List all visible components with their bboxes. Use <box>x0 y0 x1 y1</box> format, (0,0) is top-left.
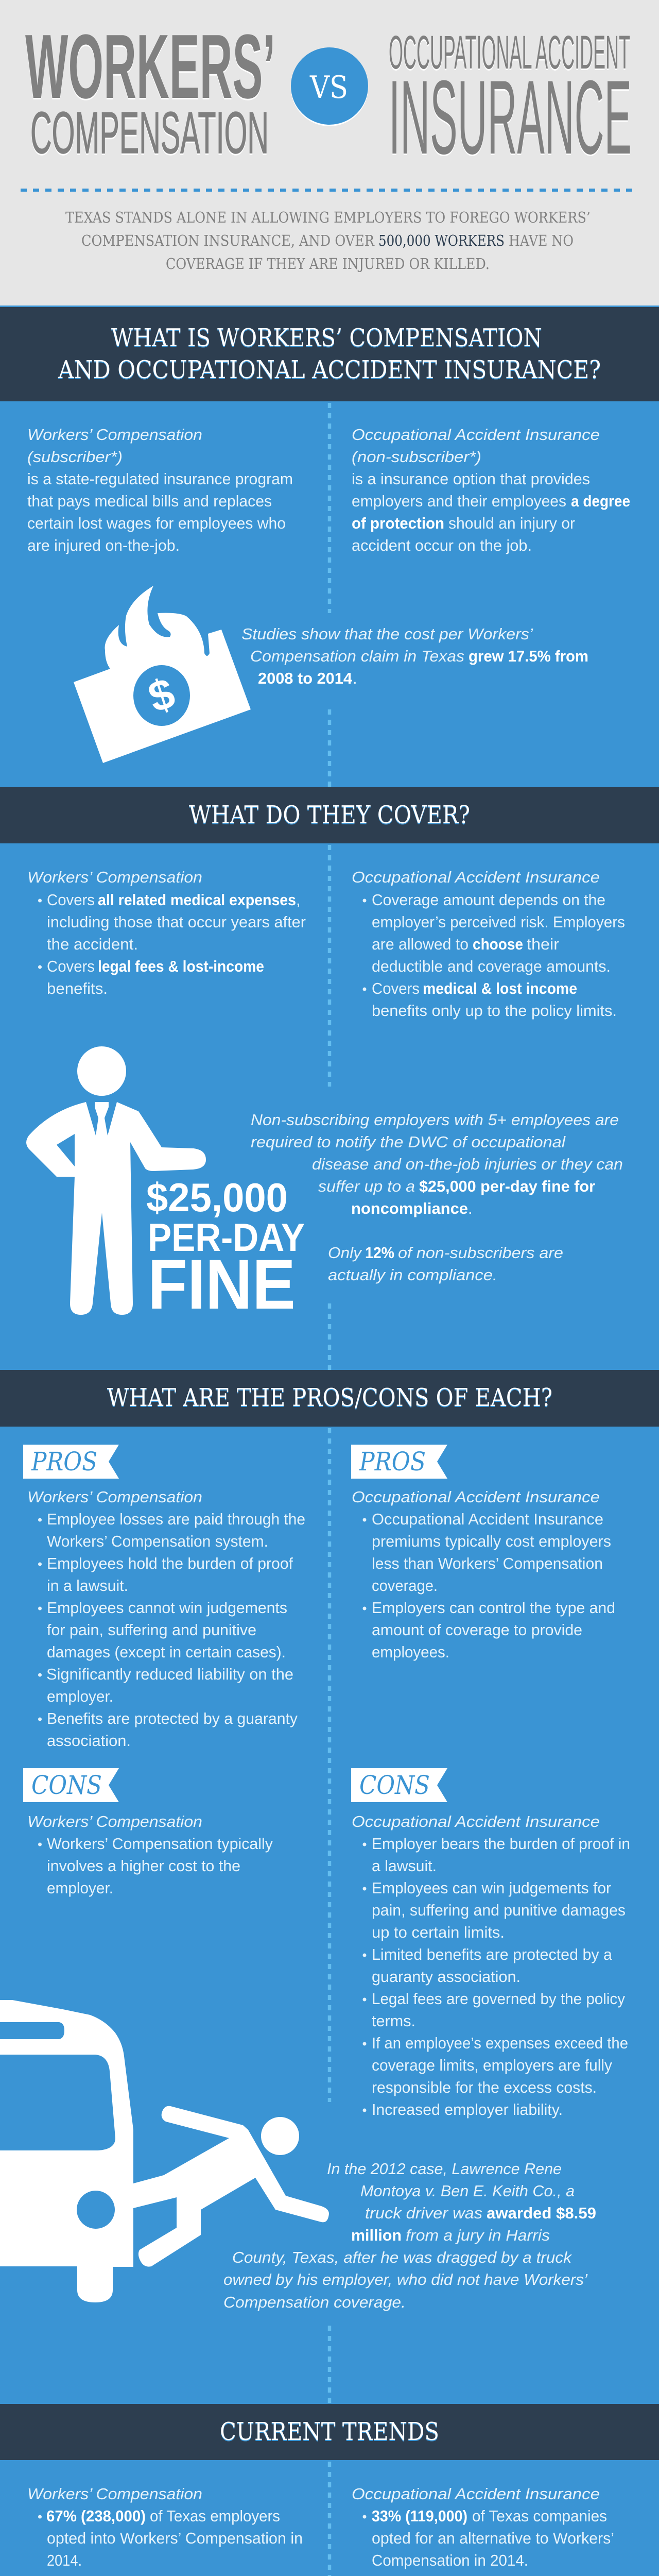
banner: pros right <box>351 1445 447 1479</box>
text: occupational coverage: are allowed to <box>372 935 469 953</box>
list: workers comp pros <box>27 1488 305 1750</box>
text: workers comp definition: certain lost wages for employees who <box>27 514 286 532</box>
list: occupational trends: Occupational Accident Insurance <box>352 2485 600 2503</box>
list: occupational pros <box>352 1488 615 1661</box>
list: workers comp pros: for pain, suffering and punitive <box>47 1621 256 1639</box>
text: occupational definition <box>352 426 630 554</box>
fine headline: PER-DAY <box>148 1216 305 1260</box>
banner: pros left: PROS <box>31 1447 97 1477</box>
vs badge <box>291 47 368 126</box>
text: occupational definition: is a insurance option that provides <box>352 470 590 488</box>
callout: non-subscribing penalty: of non-subscribers are <box>398 1244 563 1262</box>
vs badge: VS <box>309 70 348 106</box>
text: workers comp coverage: Covers <box>47 891 95 909</box>
text: workers comp definition <box>27 426 293 554</box>
callout: non-subscribing penalty: $25,000 per-day fine for <box>419 1177 595 1195</box>
text: occupational coverage: Occupational Accident Insurance <box>352 868 600 886</box>
list: occupational cons: Employees can win judgements for <box>372 1879 611 1897</box>
text: workers comp definition: (subscriber*) <box>27 448 123 466</box>
text: workers comp coverage: Workers’ Compensation <box>27 868 202 886</box>
list: workers comp cons: Workers’ Compensation <box>27 1812 202 1831</box>
intro text: HAVE NO <box>509 232 574 249</box>
text: occupational definition: should an injury or <box>448 514 575 532</box>
callout: claim cost <box>241 625 588 687</box>
callout: claim cost: Compensation claim in Texas <box>250 647 464 665</box>
banner: cons left: CONS <box>31 1770 102 1800</box>
list: workers comp pros: Workers’ Compensation system. <box>47 1532 268 1550</box>
list: occupational trends: Compensation in 2014. <box>372 2551 528 2569</box>
banner: pros left <box>23 1445 119 1479</box>
text: occupational coverage: choose <box>473 935 523 953</box>
list: occupational trends <box>352 2485 629 2576</box>
heading: what is: WHAT IS WORKERS’ COMPENSATION <box>111 324 542 352</box>
callout: court case <box>223 2160 596 2311</box>
callout: court case: Compensation coverage. <box>223 2293 406 2311</box>
heading: what is: AND OCCUPATIONAL ACCIDENT INSURANCE? <box>58 355 601 384</box>
callout: non-subscribing penalty: actually in compliance. <box>328 1266 497 1284</box>
icon: burning money <box>74 586 251 763</box>
list: workers comp pros: Employees hold the burden of proof <box>47 1554 293 1572</box>
list: workers comp pros: Employee losses are paid through the <box>47 1510 305 1528</box>
list: occupational pros: premiums typically cost employers <box>372 1532 611 1550</box>
icon: bus dragging person <box>0 2000 329 2302</box>
list: occupational cons: If an employee’s expenses exceed the <box>372 2034 628 2052</box>
callout: court case: County, Texas, after he was dragged by a truck <box>232 2248 573 2266</box>
text: occupational coverage: Coverage amount depends on the <box>372 891 605 909</box>
banner: pros right: PROS <box>359 1447 426 1477</box>
text: occupational coverage: deductible and coverage amounts. <box>372 957 611 975</box>
text: occupational coverage <box>352 868 625 1020</box>
list: occupational cons: Employer bears the burden of proof in <box>372 1835 630 1853</box>
callout: non-subscribing penalty: suffer up to a <box>318 1177 415 1195</box>
text: occupational definition: of protection <box>352 514 444 532</box>
text: occupational coverage: employer’s perceived risk. Employers <box>372 913 625 931</box>
text: workers comp coverage: benefits. <box>47 979 108 997</box>
callout: claim cost: grew 17.5% from <box>469 647 588 665</box>
text: occupational coverage: benefits only up to the policy limits. <box>372 1002 617 1020</box>
callout: non-subscribing penalty: noncompliance <box>351 1199 468 1217</box>
intro text: COMPENSATION INSURANCE, AND OVER <box>81 232 375 249</box>
list: workers comp cons: involves a higher cost to the <box>47 1857 240 1875</box>
fine headline: FINE <box>148 1245 296 1324</box>
callout: claim cost: Studies show that the cost per Workers’ <box>241 625 533 643</box>
heading: what do they cover: WHAT DO THEY COVER? <box>189 801 470 829</box>
callout: court case: owned by his employer, who did not have Workers’ <box>223 2270 588 2289</box>
callout: non-subscribing penalty <box>251 1111 623 1284</box>
text: workers comp coverage: legal fees & lost-income <box>98 957 264 975</box>
callout: court case: from a jury in Harris <box>406 2226 550 2244</box>
text: workers comp definition: are injured on-the-job. <box>27 536 180 554</box>
text: occupational definition: a degree <box>571 492 630 510</box>
text: occupational definition: accident occur on the job. <box>352 536 532 554</box>
list: occupational trends: 33% (119,000) <box>372 2507 467 2525</box>
heading: pros and cons: WHAT ARE THE PROS/CONS OF EACH? <box>107 1383 552 1412</box>
list: workers comp pros: Benefits are protected by a guaranty <box>47 1709 298 1727</box>
callout: claim cost: . <box>353 669 357 687</box>
list: workers comp pros: association. <box>47 1732 131 1750</box>
callout: non-subscribing penalty: 12% <box>365 1244 394 1262</box>
list: workers comp pros: Employees cannot win judgements <box>47 1599 287 1617</box>
list: workers comp cons: Workers’ Compensation typically <box>47 1835 273 1853</box>
list: workers comp trends: 2014. <box>47 2551 82 2569</box>
text: workers comp coverage: all related medical expenses <box>98 891 296 909</box>
callout: court case: awarded $8.59 <box>487 2204 596 2222</box>
list: workers comp pros: in a lawsuit. <box>47 1577 128 1595</box>
intro text: TEXAS STANDS ALONE IN ALLOWING EMPLOYERS TO FOREGO WORKERS’ <box>65 209 591 226</box>
list: occupational pros: employees. <box>372 1643 449 1661</box>
list: occupational pros: coverage. <box>372 1577 438 1595</box>
callout: non-subscribing penalty: . <box>468 1199 473 1217</box>
text: workers comp coverage <box>27 868 306 997</box>
list: workers comp pros: damages (except in certain cases). <box>47 1643 286 1661</box>
text: occupational coverage: medical & lost income <box>423 979 577 997</box>
list: occupational cons: coverage limits, employers are fully <box>372 2056 612 2074</box>
text: workers comp definition: is a state-regulated insurance program <box>27 470 293 488</box>
heading: current trends: CURRENT TRENDS <box>220 2417 439 2446</box>
list: occupational pros: less than Workers’ Compensation <box>372 1554 603 1572</box>
list: occupational pros: amount of coverage to provide <box>372 1621 582 1639</box>
text: workers comp coverage: the accident. <box>47 935 138 953</box>
callout: non-subscribing penalty: Non-subscribing employers with 5+ employees are <box>251 1111 619 1129</box>
fine headline <box>146 1175 305 1324</box>
text: occupational definition: employers and their employees <box>352 492 566 510</box>
callout: court case: Montoya v. Ben E. Keith Co., a <box>360 2182 575 2200</box>
heading: what is <box>58 324 601 384</box>
intro text: COVERAGE IF THEY ARE INJURED OR KILLED. <box>166 255 490 273</box>
icon: businessman <box>26 1046 206 1315</box>
fine headline: $25,000 <box>146 1175 288 1220</box>
list: occupational cons: Legal fees are governed by the policy <box>372 1990 625 2008</box>
list: occupational pros: Occupational Accident Insurance <box>352 1488 600 1506</box>
callout: non-subscribing penalty: required to notify the DWC of occupational <box>251 1133 566 1151</box>
callout: court case: In the 2012 case, Lawrence Rene <box>327 2160 562 2178</box>
intro text: 500,000 WORKERS <box>378 232 505 249</box>
callout: court case: million <box>351 2226 402 2244</box>
list: workers comp pros: employer. <box>47 1687 113 1705</box>
list: workers comp trends: 67% (238,000) <box>46 2507 146 2525</box>
banner: cons right: CONS <box>359 1770 430 1800</box>
text: workers comp definition: Workers’ Compensation <box>27 426 202 444</box>
list: occupational cons: Increased employer liability. <box>372 2100 563 2119</box>
list: workers comp pros: Workers’ Compensation <box>27 1488 202 1506</box>
callout: court case: truck driver was <box>365 2204 482 2222</box>
list: occupational cons: responsible for the excess costs. <box>372 2078 597 2096</box>
list: occupational cons: up to certain limits. <box>372 1923 505 1941</box>
title <box>25 15 632 176</box>
list: occupational cons <box>352 1812 630 2119</box>
title: COMPENSATION <box>30 100 269 166</box>
text: workers comp definition: that pays medical bills and replaces <box>27 492 272 510</box>
list: occupational cons: a lawsuit. <box>372 1857 437 1875</box>
list: workers comp trends: Workers’ Compensation <box>27 2485 202 2503</box>
text: workers comp coverage: Covers <box>47 957 95 975</box>
list: occupational cons: guaranty association. <box>372 1968 521 1986</box>
title: WORKERS’ <box>25 15 275 117</box>
list: occupational trends: of Texas companies <box>472 2507 607 2525</box>
intro text <box>65 209 591 273</box>
list: occupational pros: Occupational Accident Insurance <box>372 1510 603 1528</box>
callout: claim cost: 2008 to 2014 <box>258 669 353 687</box>
icon: burning money: $ <box>143 668 180 722</box>
callout: non-subscribing penalty: Only <box>328 1244 363 1262</box>
text: occupational coverage: Covers <box>372 979 420 997</box>
list: workers comp cons <box>27 1812 273 1897</box>
text: workers comp coverage: , <box>296 891 301 909</box>
list: occupational trends: opted for an alternative to Workers’ <box>372 2529 614 2547</box>
list: occupational cons: Occupational Accident Insurance <box>352 1812 600 1831</box>
callout: non-subscribing penalty: disease and on-the-job injuries or they can <box>312 1155 623 1173</box>
text: occupational coverage: their <box>527 935 559 953</box>
list: occupational pros: Employers can control the type and <box>372 1599 615 1617</box>
list: workers comp trends: opted into Workers’ Compensation in <box>47 2529 303 2547</box>
text: occupational definition: (non-subscriber*) <box>352 448 481 466</box>
list: workers comp pros: Significantly reduced liability on the <box>46 1665 293 1683</box>
text: occupational definition: Occupational Accident Insurance <box>352 426 600 444</box>
list: workers comp cons: employer. <box>47 1879 113 1897</box>
text: workers comp coverage: including those that occur years after <box>47 913 306 931</box>
list: workers comp trends <box>27 2485 303 2576</box>
list: occupational cons: terms. <box>372 2012 415 2030</box>
list: workers comp trends: of Texas employers <box>150 2507 280 2525</box>
list: occupational cons: pain, suffering and punitive damages <box>372 1901 626 1919</box>
list: occupational cons: Limited benefits are protected by a <box>372 1945 613 1963</box>
